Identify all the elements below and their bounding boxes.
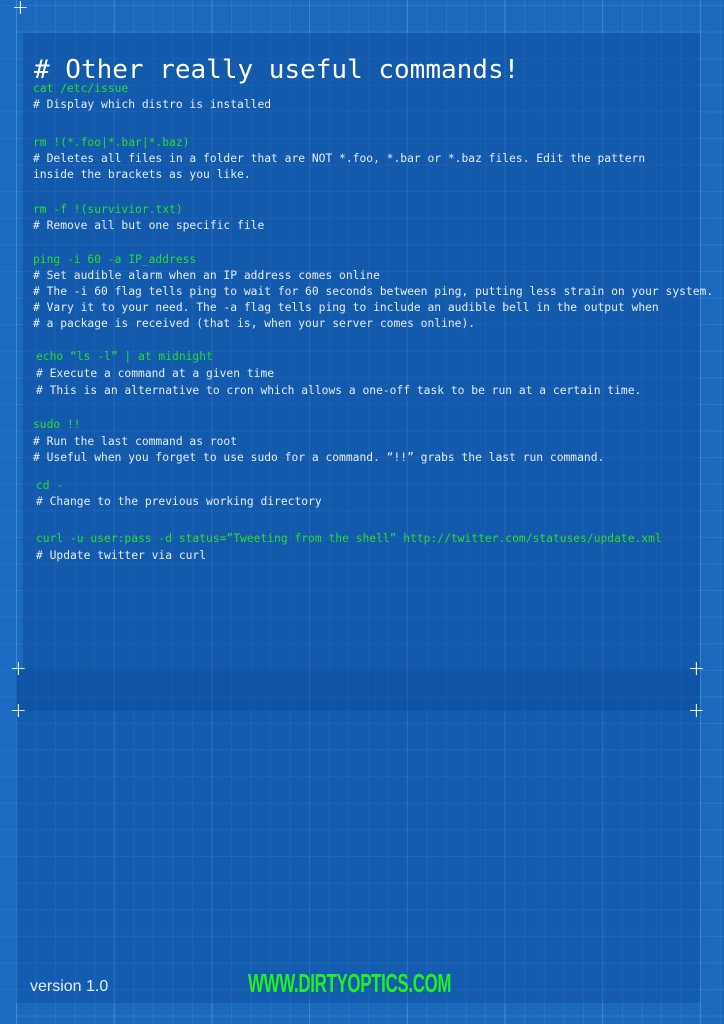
footer: version: version 1.0 <box>30 978 108 995</box>
footer: website: WWW.DIRTYOPTICS.COM <box>248 968 451 998</box>
icon: crosshair right lower: + <box>688 698 705 722</box>
icon: crosshair right upper: + <box>688 656 705 680</box>
title: # Other really useful commands! <box>34 55 519 85</box>
text block: ping: ping -i 60 -a IP_address # Set audible alarm when an IP address comes online # The -i 60 flag tells ping to wait for 60 seconds between ping, putting less strain on your system. # Vary it to your need. The -a flag tells ping to include an audible bell in the output when # a package is received (that is, when your server comes online). <box>33 253 713 330</box>
text block: curl: curl -u user:pass -d status=”Tweeting from the shell” http://twitter.com/statuses/update.xml # Update twitter via curl <box>36 532 662 562</box>
text block: at: echo “ls -l” | at midnight # Execute a command at a given time # This is an alternative to cron which allows a one-off task to be run at a certain time. <box>36 350 641 397</box>
icon: crosshair left upper: + <box>10 656 27 680</box>
text block: rm -f: rm -f !(survivior.txt) # Remove all but one specific file <box>33 203 264 232</box>
text block: cat: cat /etc/issue # Display which distro is installed <box>33 82 271 111</box>
text block: rm pattern: rm !(*.foo|*.bar|*.baz) # Deletes all files in a folder that are NOT *.foo, *.bar or *.baz files. Edit the pattern inside the brackets as you like. <box>33 136 645 181</box>
text block: sudo: sudo !! # Run the last command as root # Useful when you forget to use sudo for a command. “!!” grabs the last run command. <box>33 418 604 464</box>
text block: cd: cd - # Change to the previous working directory <box>36 479 322 508</box>
icon: crosshair left lower: + <box>10 698 27 722</box>
